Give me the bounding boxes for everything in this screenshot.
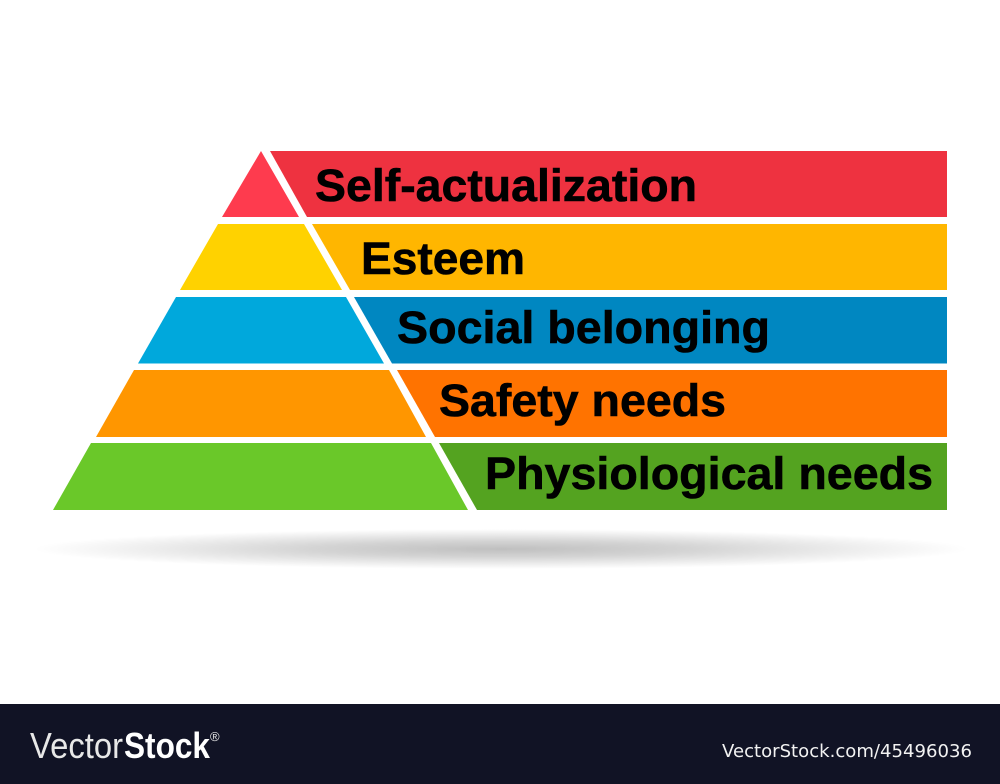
label: Physiological needs: Physiological needs xyxy=(485,448,933,499)
band: amber xyxy=(312,224,947,290)
pyramid segment: yellow xyxy=(180,224,342,290)
label: Social belonging: Social belonging xyxy=(397,302,770,353)
band: blue xyxy=(354,297,947,364)
band: green xyxy=(439,443,947,510)
pyramid segment: red triangle xyxy=(222,151,299,217)
label: Esteem: Esteem xyxy=(361,233,525,284)
logo: registered mark: ® xyxy=(210,729,220,744)
logo: Vector: Vector xyxy=(30,725,123,766)
band: red xyxy=(270,151,947,217)
footer bar xyxy=(0,704,1000,784)
ground shadow xyxy=(33,529,969,569)
pyramid segment: light blue xyxy=(138,297,384,364)
pyramid level 3: social belonging xyxy=(138,297,947,364)
pyramid segment: orange xyxy=(96,370,426,437)
pyramid level 5: physiological needs xyxy=(53,443,947,510)
label: Self-actualization: Self-actualization xyxy=(315,160,697,211)
pyramid level 2: esteem xyxy=(180,224,947,290)
band: dark orange xyxy=(397,370,947,437)
pyramid level 4: safety needs xyxy=(96,370,947,437)
pyramid level 1: self-actualization xyxy=(222,151,947,217)
label: Safety needs: Safety needs xyxy=(439,375,726,426)
logo: Stock: Stock xyxy=(124,725,211,766)
image id: VectorStock.com/45496036 xyxy=(722,741,972,762)
pyramid segment: light green xyxy=(53,443,468,510)
